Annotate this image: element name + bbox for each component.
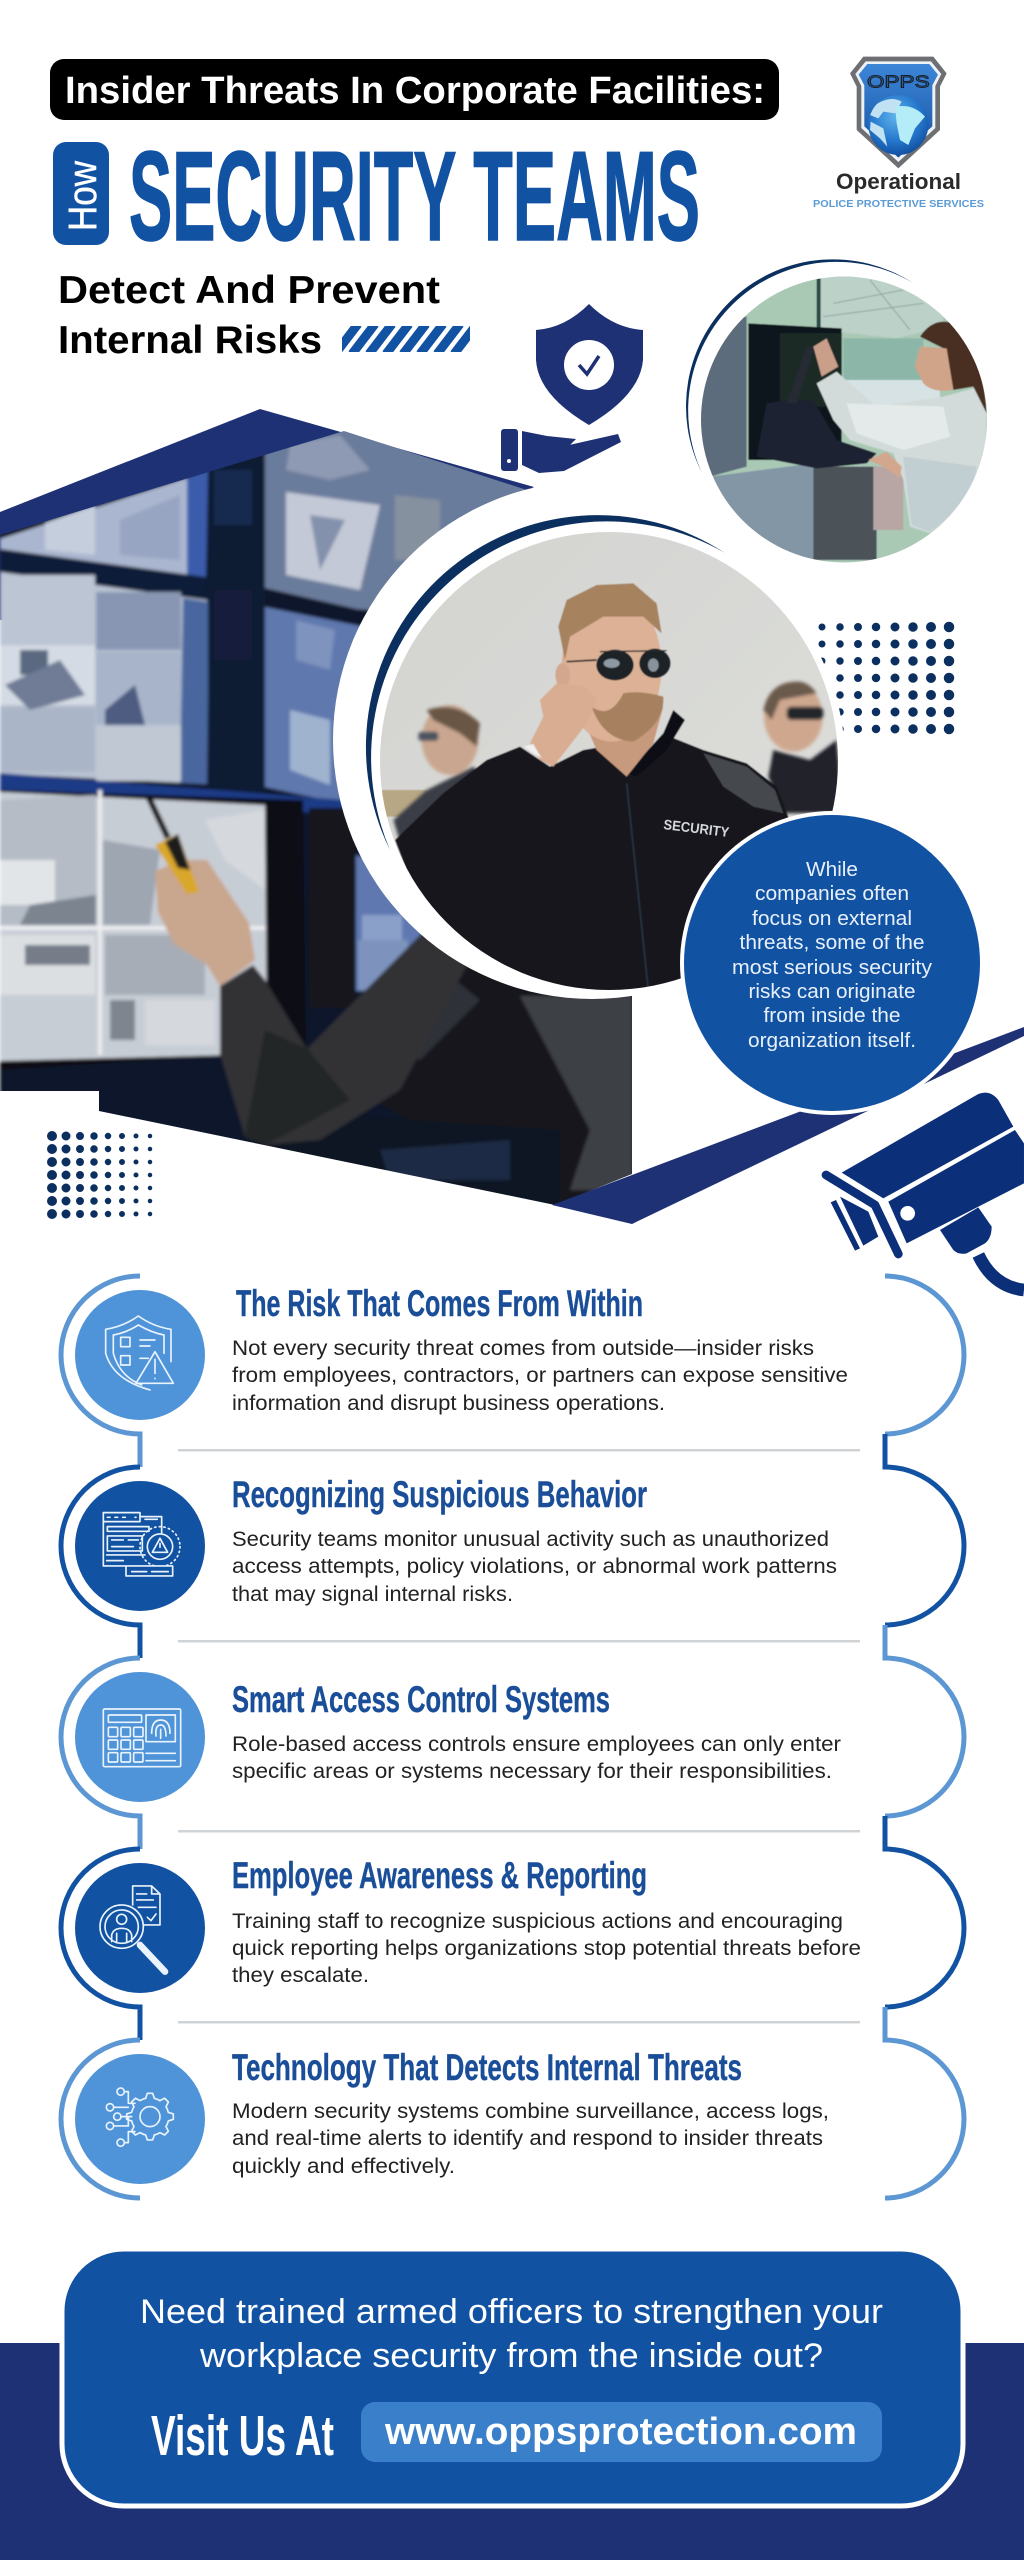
callout: intro circle: threats, some of the — [740, 932, 924, 954]
callout: intro circle: focus on external — [752, 908, 912, 930]
step 3 text — [232, 1679, 841, 1783]
logo: OPPS — [867, 71, 930, 91]
navy diagonal band — [552, 1027, 1024, 1224]
footer band — [0, 2343, 1024, 2560]
step 5 text: Modern security systems combine surveillance, access logs, — [232, 2100, 829, 2123]
logo: POLICE PROTECTIVE SERVICES — [813, 198, 984, 210]
title pill: Insider Threats In Corporate Facilities: — [65, 70, 765, 112]
step 5 text — [232, 2047, 829, 2178]
step 1 text: from employees, contractors, or partners can expose sensitive — [232, 1364, 848, 1387]
step 5 text: quickly and effectively. — [232, 2155, 455, 2178]
security officer photo: SECURITY — [663, 816, 731, 840]
step 2 text: Security teams monitor unusual activity such as unauthorized — [232, 1528, 829, 1551]
panel: step 5 frame — [61, 2007, 964, 2198]
white circle frame — [333, 481, 851, 999]
how badge: How — [61, 161, 105, 231]
diagonal stripes — [342, 326, 470, 352]
callout: intro circle: from inside the — [764, 1005, 900, 1027]
subheading — [58, 269, 440, 362]
step 2 text — [232, 1474, 837, 1606]
panel: call to action: Visit Us At — [151, 2404, 334, 2468]
locker photo — [701, 276, 987, 562]
step 4 text: Training staff to recognize suspicious actions and encouraging — [232, 1910, 843, 1933]
logo: Operational — [836, 169, 961, 194]
hand icon — [501, 429, 621, 473]
step 4 text — [232, 1855, 861, 1987]
callout: intro circle: most serious security — [732, 957, 932, 979]
step 2 icon: alert dashboard — [75, 1481, 205, 1611]
panel: step 4 frame — [61, 1816, 964, 2040]
step 5 text: Technology That Detects Internal Threats — [232, 2047, 742, 2088]
crescent: locker photo — [686, 259, 913, 473]
step 1 text: The Risk That Comes From Within — [236, 1283, 643, 1324]
callout: intro circle — [680, 811, 984, 1115]
callout: intro circle: While — [806, 859, 858, 881]
shield icon — [536, 304, 643, 425]
how badge — [53, 142, 109, 245]
step 1 text — [232, 1283, 848, 1415]
step 4 text: they escalate. — [232, 1964, 369, 1987]
subheading: Detect And Prevent — [58, 269, 440, 312]
navy band behind surveillance photo — [0, 409, 534, 620]
step 2 text: that may signal internal risks. — [232, 1583, 513, 1606]
security officer photo — [370, 520, 850, 1000]
panel: call to action: workplace security from the inside out? — [199, 2337, 823, 2375]
step 3 text: specific areas or systems necessary for their responsibilities. — [232, 1760, 832, 1783]
callout: intro circle: companies often — [755, 883, 909, 905]
panel: step 1 frame — [61, 1276, 964, 1467]
callout: intro circle: organization itself. — [748, 1030, 916, 1052]
step 1 text: information and disrupt business operations. — [232, 1392, 665, 1415]
callout: intro circle: risks can originate — [748, 981, 916, 1003]
panel: step 3 frame — [61, 1625, 964, 1849]
step 2 text: access attempts, policy violations, or abnormal work patterns — [232, 1555, 837, 1578]
step 5 text: and real-time alerts to identify and respond to insider threats — [232, 2127, 823, 2150]
step 1 icon: shield checklist — [75, 1290, 205, 1420]
dot grid: top right — [822, 627, 949, 746]
panel: step 2 frame — [61, 1434, 964, 1658]
surveillance room photo — [0, 400, 640, 1230]
subheading: Internal Risks — [58, 319, 322, 362]
logo — [813, 57, 984, 210]
crescent: main photo — [366, 515, 725, 850]
panel: call to action: www.oppsprotection.com — [384, 2411, 857, 2453]
dot grid: bottom left — [52, 1136, 150, 1227]
icon: security camera — [826, 1093, 1024, 1290]
step 3 text: Role-based access controls ensure employees can only enter — [232, 1733, 841, 1756]
step 5 icon: circuit gear — [75, 2054, 205, 2184]
step 4 icon: magnifier and document — [75, 1863, 205, 1993]
step 3 icon: access keypad — [75, 1672, 205, 1802]
step 1 text: Not every security threat comes from outside—insider risks — [232, 1337, 814, 1360]
step 4 text: Employee Awareness & Reporting — [232, 1855, 647, 1896]
step 4 text: quick reporting helps organizations stop potential threats before — [232, 1937, 861, 1960]
panel: call to action — [62, 2249, 963, 2506]
step 2 text: Recognizing Suspicious Behavior — [232, 1474, 647, 1515]
step 3 text: Smart Access Control Systems — [232, 1679, 610, 1720]
title pill — [50, 59, 779, 120]
panel: call to action: Need trained armed officers to strengthen your — [140, 2293, 883, 2331]
